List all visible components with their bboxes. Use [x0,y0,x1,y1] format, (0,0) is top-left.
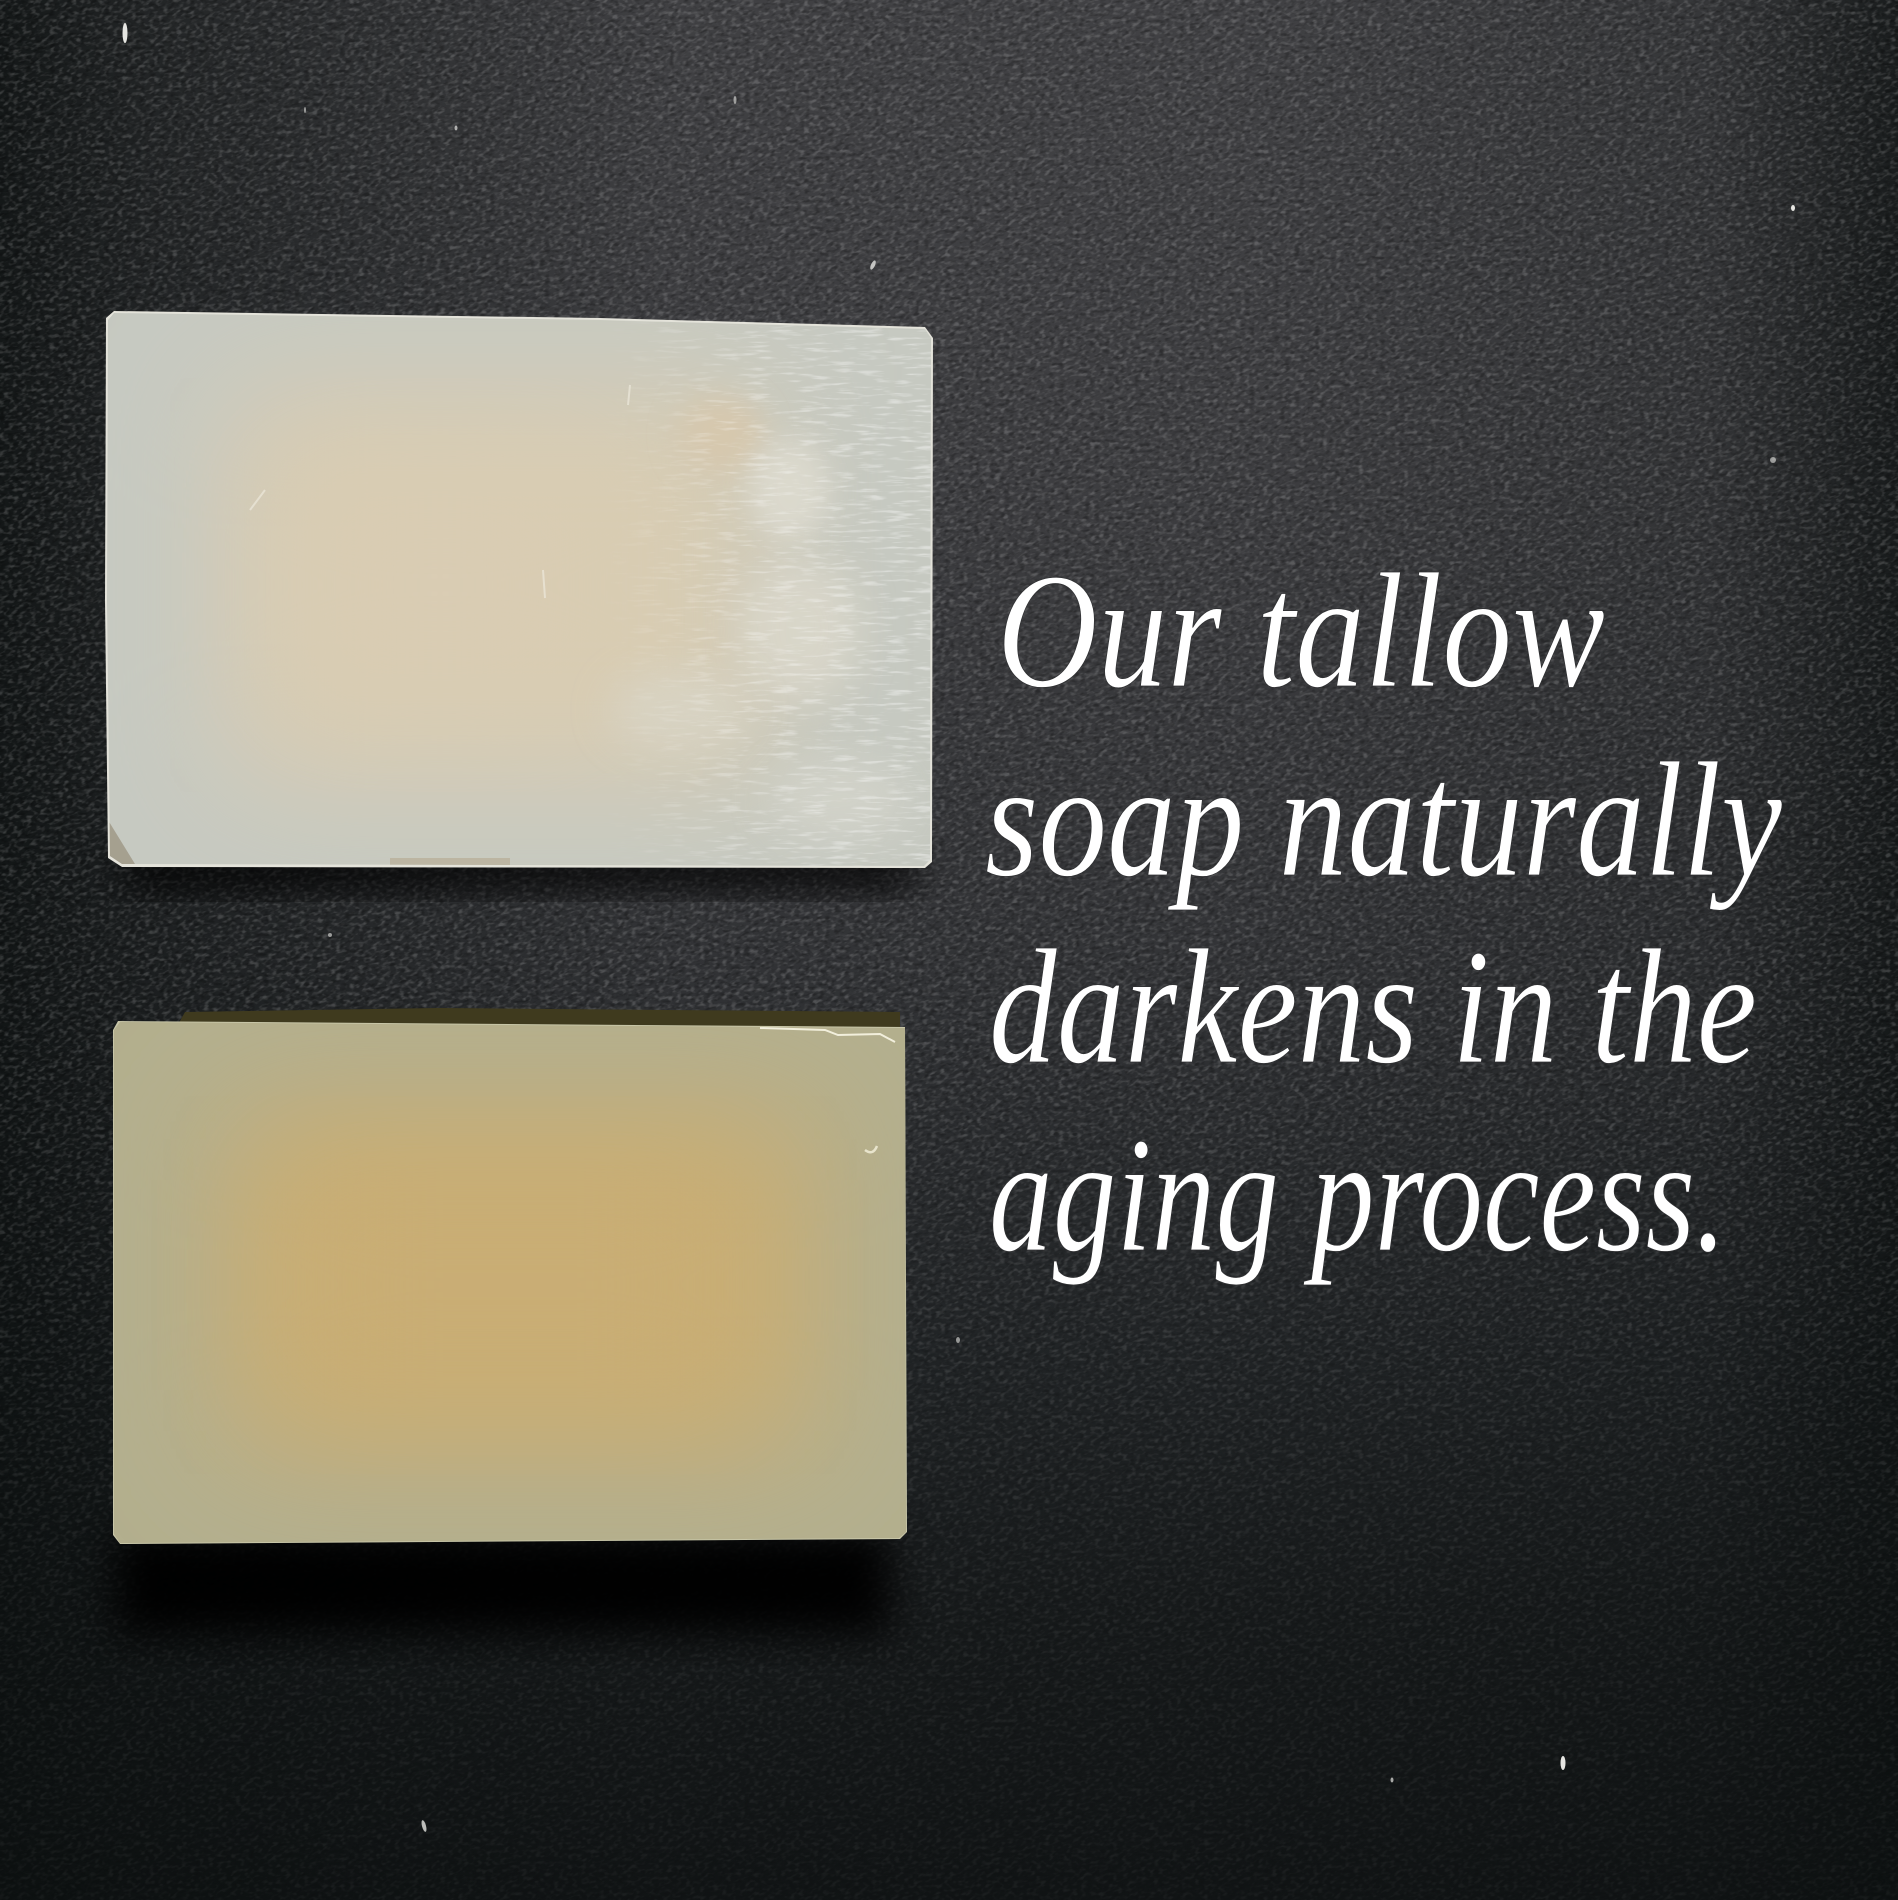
headline text [985,539,1783,1286]
shadow: top soap [125,850,915,890]
line 4: aging process. [989,1103,1727,1286]
line 3: darkens in the [989,915,1757,1098]
shadow: bottom soap [115,1530,890,1635]
line 2: soap naturally [985,728,1783,911]
bottom soap bar: darkened, aged [100,1015,920,1550]
bottom soap top edge: dark side [175,1008,900,1030]
line 1: Our tallow [997,539,1605,722]
top soap bar: pale, fresh [100,305,940,875]
